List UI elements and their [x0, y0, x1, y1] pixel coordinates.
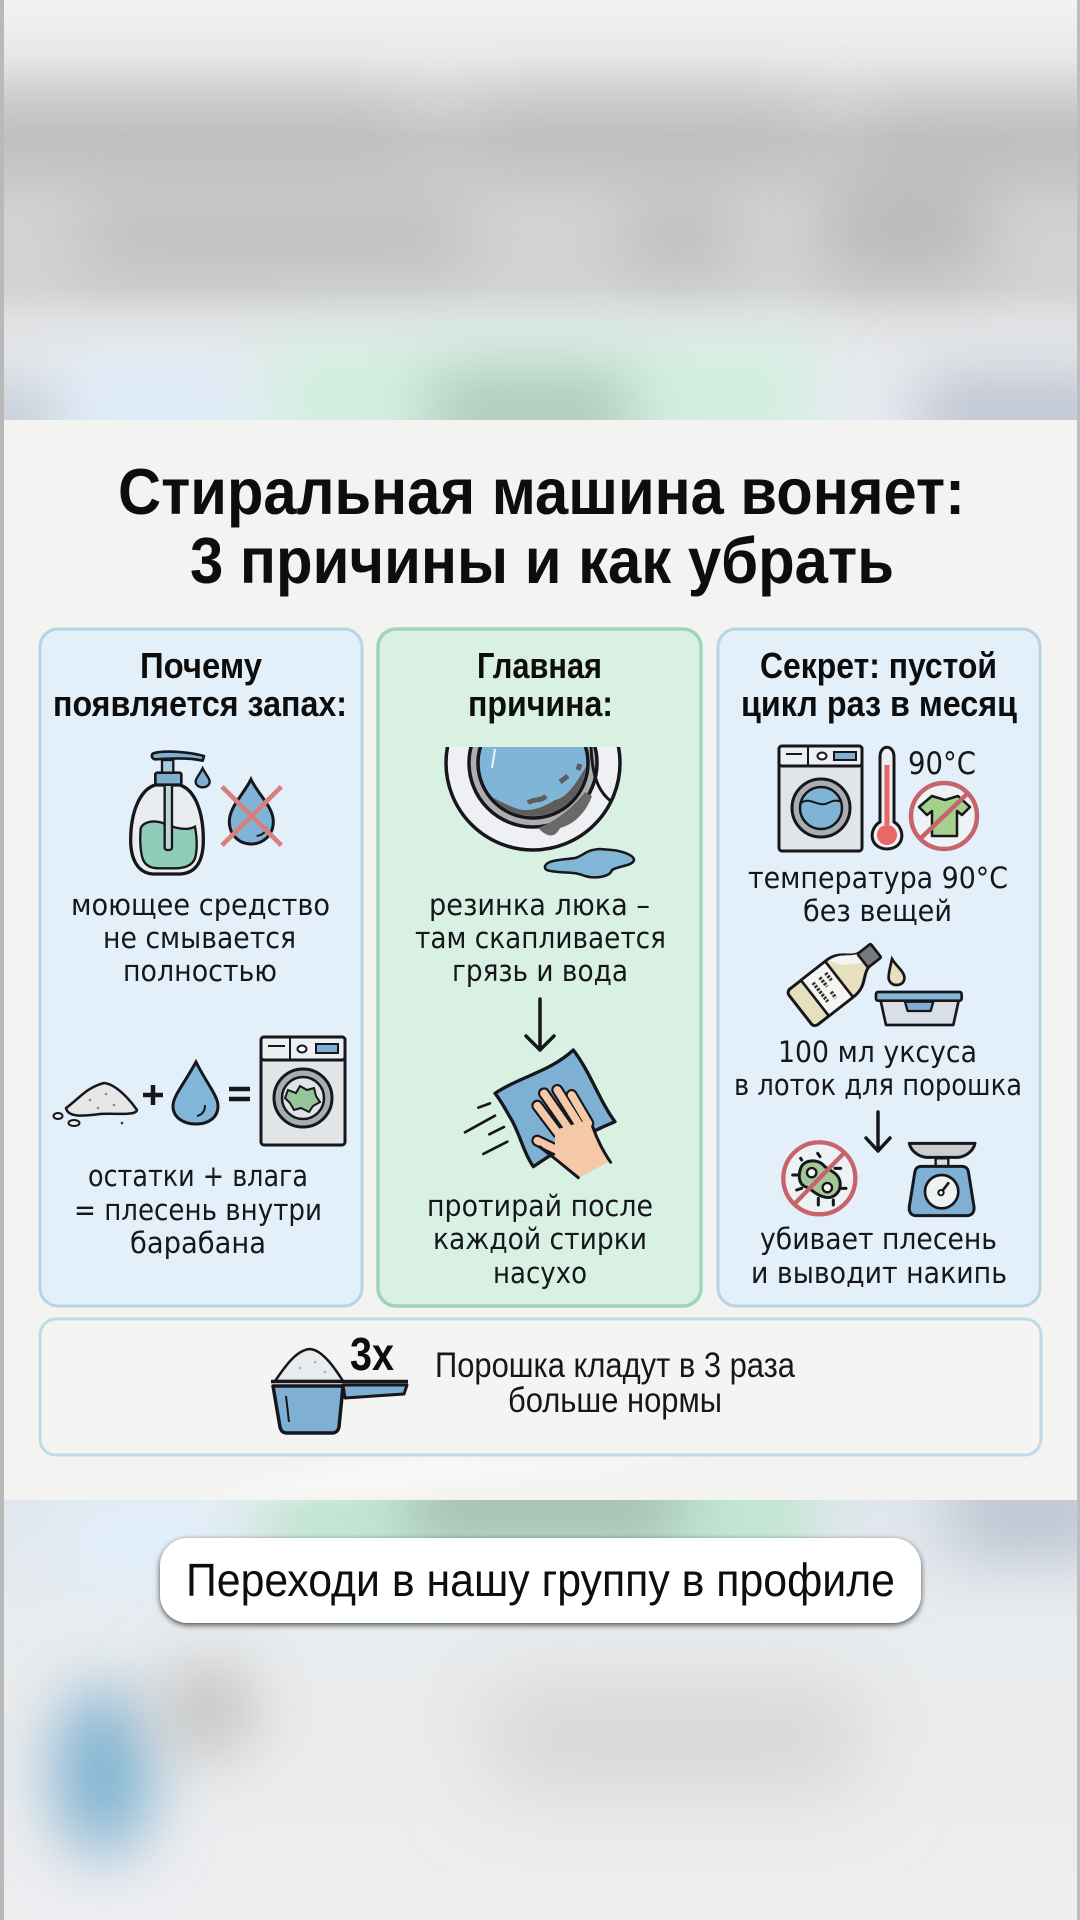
note text: больше нормы: [508, 1381, 722, 1420]
icon: equals: [229, 1089, 250, 1099]
body text: wipe: каждой стирки: [433, 1222, 647, 1256]
body text: temperature: [748, 861, 1008, 928]
body text: detergent: моющее средство: [71, 888, 330, 922]
title: Стиральная машина воняет:: [118, 455, 965, 528]
body text: mold: остатки + влага: [88, 1159, 308, 1193]
icon: crossed-out mold: [783, 1142, 855, 1214]
heading: причина:: [468, 683, 613, 724]
heading: [741, 645, 1017, 724]
call to action button: Переходи в нашу группу в профиле: [186, 1554, 895, 1606]
icon: moldy washing machine: [261, 1037, 345, 1145]
panel: bottom powder note: [40, 1319, 1041, 1455]
heading: появляется запах:: [53, 683, 347, 724]
blurred background: bottom: [4, 1500, 1077, 1894]
body text: result: [751, 1222, 1007, 1290]
body text: gasket: там скапливается: [415, 921, 666, 955]
heading: Главная: [477, 645, 602, 686]
panel: secret monthly empty cycle: [718, 629, 1040, 1306]
blurred background: top: [4, 57, 1077, 420]
heading: [53, 645, 347, 724]
icon: vinegar bottle pouring into tray: [786, 933, 962, 1027]
body text: wipe: насухо: [493, 1256, 587, 1290]
body text: temperature: без вещей: [803, 894, 952, 928]
heading: Почему: [140, 645, 262, 686]
card background: [718, 629, 1040, 1306]
panel: main cause: [378, 629, 701, 1306]
call to action button: [160, 1538, 921, 1623]
body text: temperature: температура 90°C: [748, 861, 1008, 895]
body text: wipe: протирай после: [427, 1189, 653, 1223]
body text: detergent: полностью: [123, 954, 277, 988]
body text: vinegar: [734, 1035, 1022, 1102]
icon: kitchen scale: [909, 1143, 975, 1216]
icon: washer door with dirty gasket: [444, 747, 636, 879]
arrow: [526, 999, 554, 1050]
card background: [40, 1319, 1041, 1455]
icon: measuring scoop with powder: [271, 1349, 408, 1433]
body text: gasket: резинка люка –: [429, 888, 650, 922]
body text: detergent: не смывается: [103, 921, 296, 955]
body text: gasket: грязь и вода: [452, 954, 628, 988]
icon: washing machine: [779, 746, 862, 851]
body text: gasket: [415, 888, 666, 988]
icon: soap pump bottle: [131, 752, 210, 874]
card background: [378, 629, 701, 1306]
icon: thermometer: [872, 747, 902, 849]
title: 3 причины и как убрать: [190, 524, 894, 597]
icon: crossed-out water drop: [222, 779, 281, 845]
icon: plus: [143, 1085, 163, 1105]
note text: Порошка кладут в 3 раза: [435, 1346, 795, 1385]
body text: result: убивает плесень: [760, 1222, 997, 1256]
body text: mold: = плесень внутри: [74, 1193, 322, 1227]
icon: water drop: [173, 1062, 218, 1124]
body text: wipe: [427, 1189, 653, 1290]
card background: [40, 629, 362, 1306]
body text: vinegar: в лоток для порошка: [734, 1068, 1022, 1102]
icon: powder pile: [54, 1083, 137, 1126]
infographic content: [40, 455, 1041, 1455]
icon: no clothes: [911, 783, 977, 849]
icon: hand wiping with cloth: [465, 1050, 615, 1178]
body text: detergent: [71, 888, 330, 988]
label: 90°C: 90°C: [908, 746, 976, 782]
body text: mold: [74, 1159, 322, 1260]
heading: Секрет: пустой: [760, 645, 997, 686]
label: 3x: 3x: [350, 1328, 394, 1380]
heading: цикл раз в месяц: [741, 683, 1017, 724]
body text: mold: барабана: [130, 1226, 266, 1260]
body text: vinegar: 100 мл уксуса: [778, 1035, 977, 1069]
heading: [468, 645, 613, 724]
note text: [435, 1346, 795, 1420]
arrow: [866, 1112, 890, 1151]
body text: result: и выводит накипь: [751, 1256, 1007, 1290]
main infographic sheet: [4, 420, 1077, 1500]
panel: why smell appears: [40, 629, 362, 1306]
title: [118, 455, 965, 597]
